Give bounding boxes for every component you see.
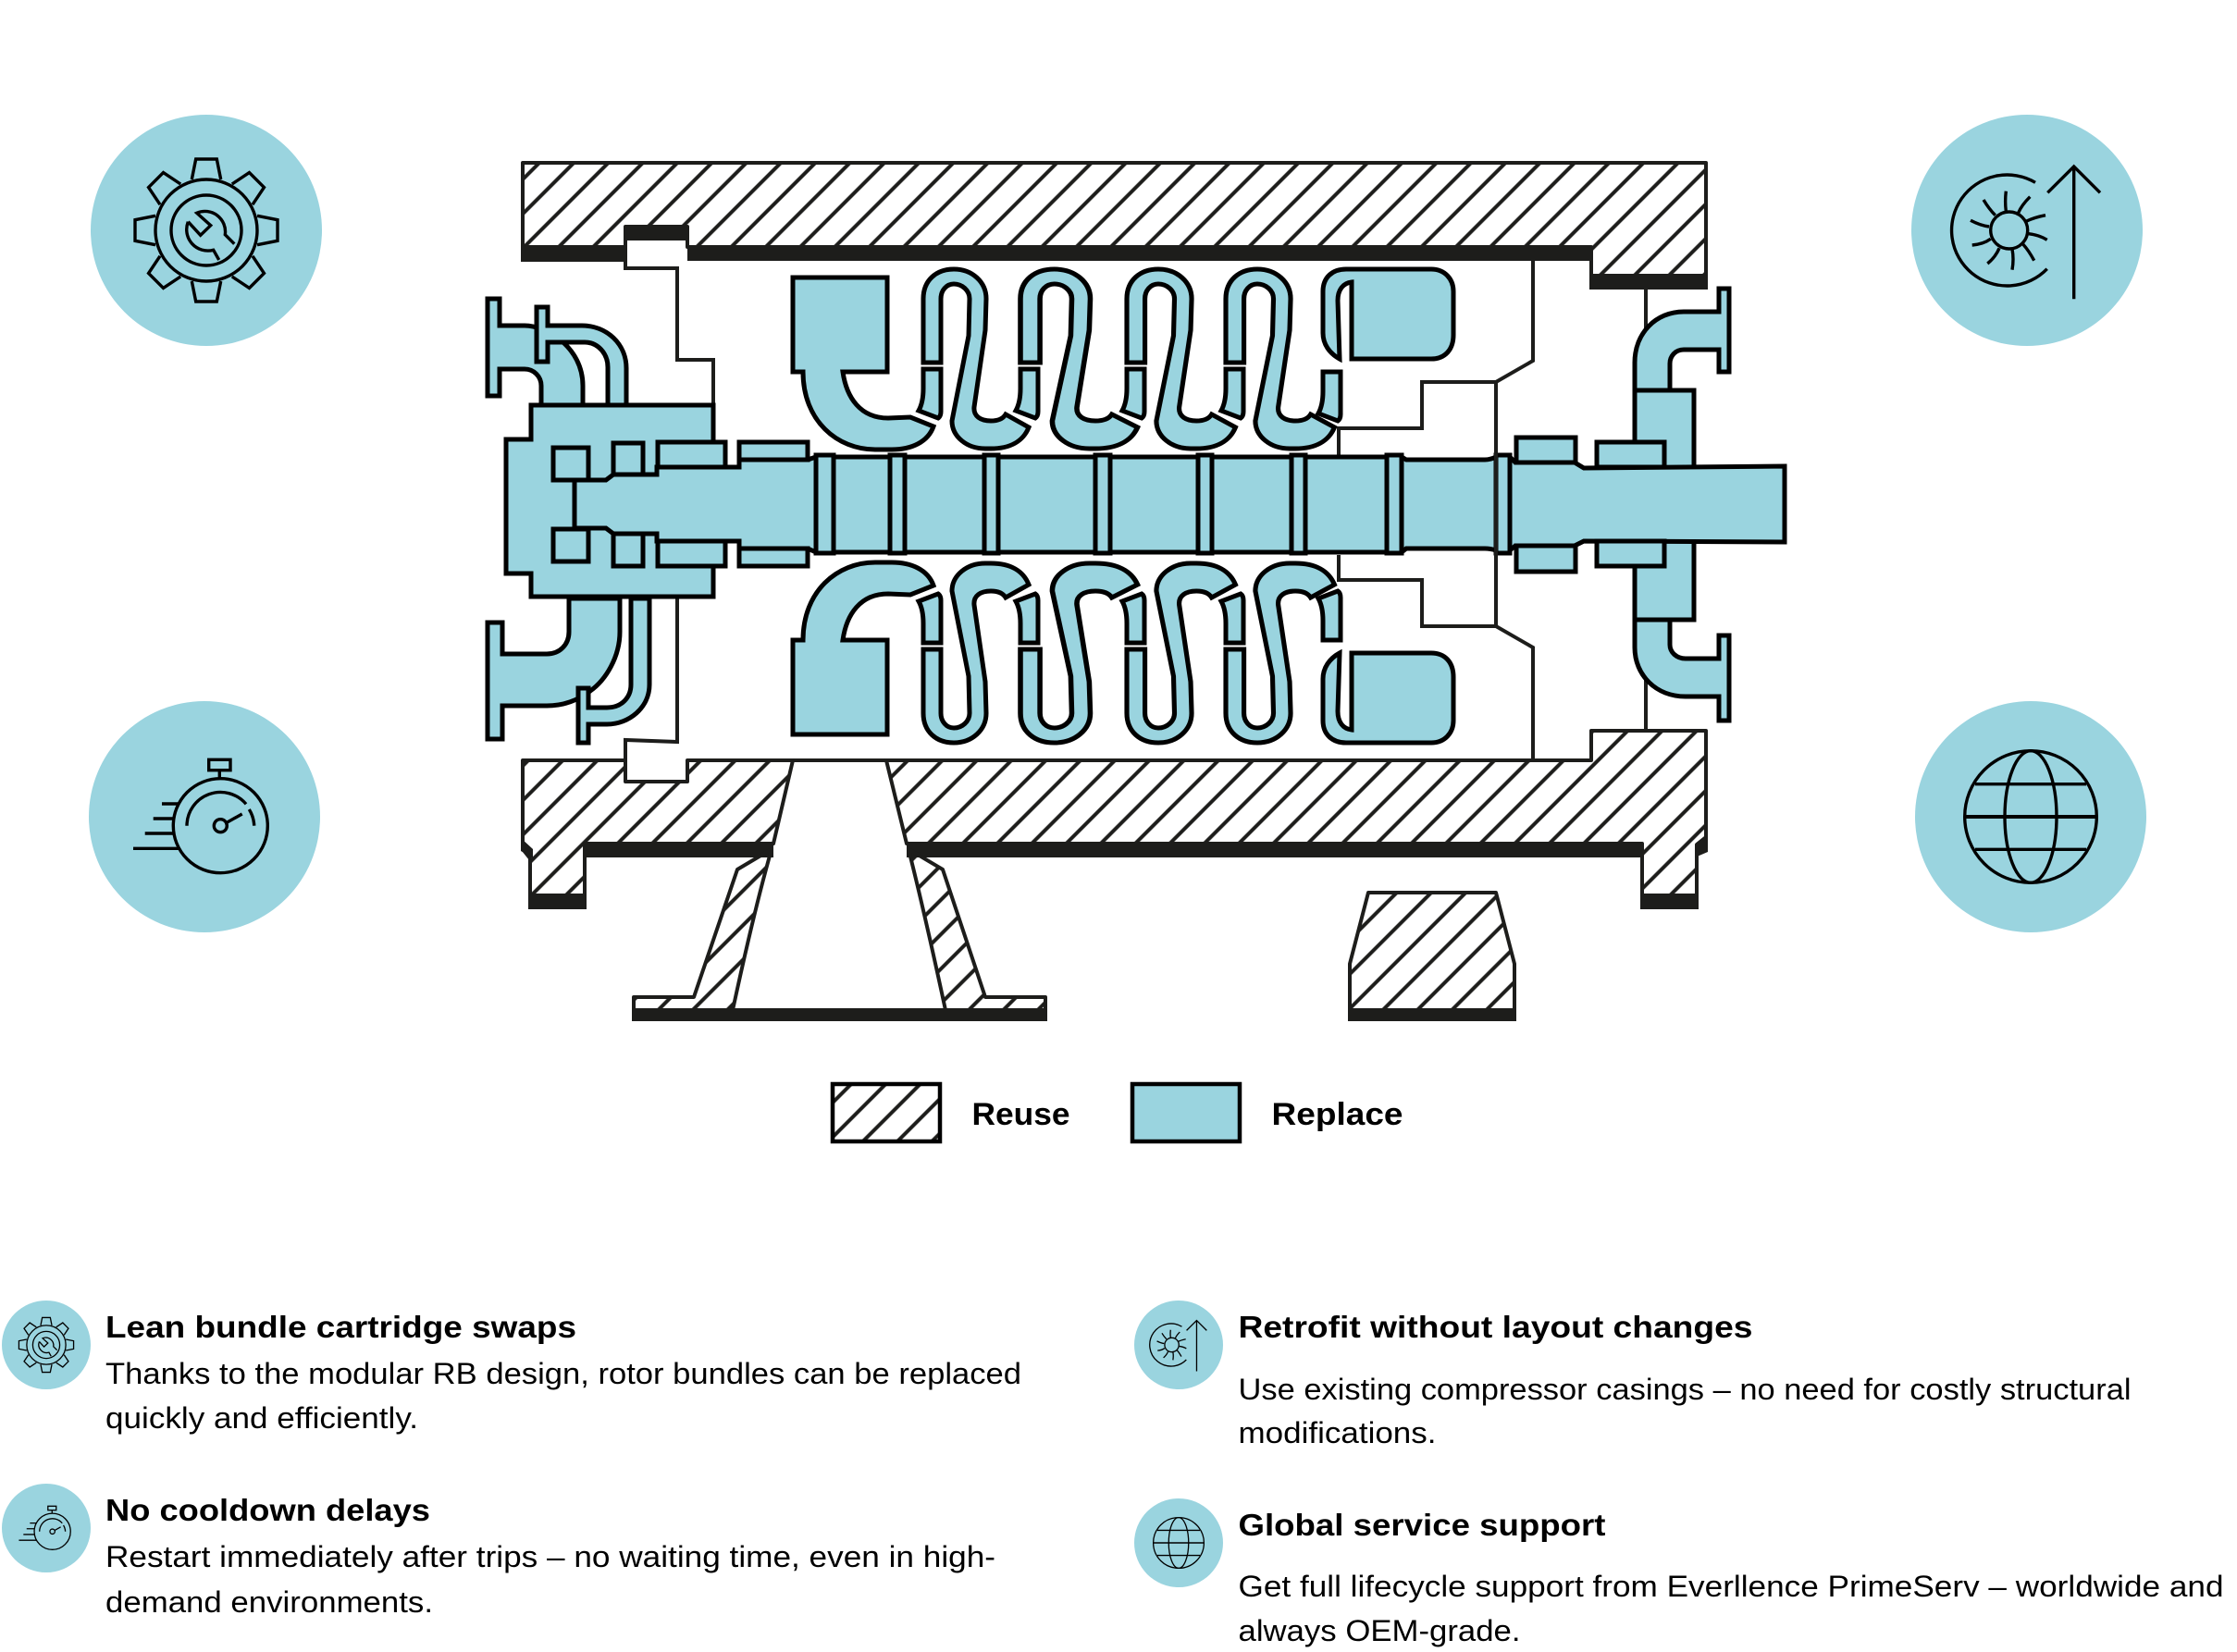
left pedestal: reuse xyxy=(632,849,1047,1021)
upper impeller stages xyxy=(793,269,1453,450)
body text: Restart immediately after trips – no waiting time, even in high- xyxy=(105,1540,995,1573)
body text: demand environments. xyxy=(105,1585,433,1619)
lower impeller stages xyxy=(793,562,1453,743)
heading: Lean bundle cartridge swaps xyxy=(105,1310,576,1344)
left bottom pipes xyxy=(488,598,649,743)
body text xyxy=(105,1540,995,1619)
return channel 3 xyxy=(1127,269,1235,449)
body text: always OEM-grade. xyxy=(1238,1614,1521,1647)
small icon: impeller with arrow xyxy=(1134,1301,1223,1389)
legend label: replace: Replace xyxy=(1271,1097,1403,1132)
legend label: reuse: Reuse xyxy=(971,1097,1069,1132)
body text: Thanks to the modular RB design, rotor bundles can be replaced xyxy=(105,1357,1021,1390)
seal and bearing boxes xyxy=(553,438,1664,572)
small icon: gear xyxy=(2,1301,91,1389)
compressor cross-section diagram xyxy=(488,163,1785,1021)
left bearing housing block xyxy=(506,405,713,597)
outlet chamber xyxy=(1323,269,1453,359)
body text: Get full lifecycle support from Everllence PrimeServ – worldwide and xyxy=(1238,1570,2224,1603)
legend swatch: reuse xyxy=(833,1084,940,1141)
rotor shaft xyxy=(575,457,1785,552)
legend swatch: replace xyxy=(1132,1084,1240,1141)
icon: impeller with up arrow, large circle xyxy=(1911,115,2143,346)
body text xyxy=(105,1357,1021,1435)
legend xyxy=(833,1084,1403,1141)
lower leg pieces xyxy=(919,369,1341,421)
icon: stopwatch, large circle xyxy=(89,701,320,932)
right pipes and column xyxy=(1635,289,1729,721)
body text xyxy=(1238,1570,2224,1647)
return channel 2 xyxy=(1020,269,1138,449)
icon: gear with wrench, large circle xyxy=(91,115,322,346)
upper casing: reuse xyxy=(521,163,1708,290)
heading: Global service support xyxy=(1238,1508,1606,1542)
body text: quickly and efficiently. xyxy=(105,1401,418,1435)
body text: modifications. xyxy=(1238,1416,1436,1449)
heading: Retrofit without layout changes xyxy=(1238,1310,1752,1344)
shaft collars xyxy=(816,455,1510,553)
inlet volute xyxy=(793,277,933,450)
return channel 4 xyxy=(1226,269,1334,449)
feature: retrofit without layout changes xyxy=(1134,1301,2132,1449)
heading: No cooldown delays xyxy=(105,1493,430,1527)
return channel 1 xyxy=(923,269,1029,449)
left top pipes xyxy=(488,299,626,405)
feature: global service support xyxy=(1134,1498,2224,1647)
centre line over collar xyxy=(1494,382,1498,626)
icon: globe, large circle xyxy=(1915,701,2146,932)
small icon: globe xyxy=(1134,1498,1223,1587)
feature: lean bundle cartridge swaps xyxy=(2,1301,1021,1435)
body text xyxy=(1238,1373,2132,1449)
internal outline lines xyxy=(625,240,1646,782)
feature: no cooldown delays xyxy=(2,1484,995,1619)
right support foot: reuse xyxy=(1348,893,1516,1021)
small icon: stopwatch xyxy=(2,1484,91,1572)
body text: Use existing compressor casings – no need for costly structural xyxy=(1238,1373,2132,1406)
lower casing: reuse xyxy=(521,731,1708,909)
